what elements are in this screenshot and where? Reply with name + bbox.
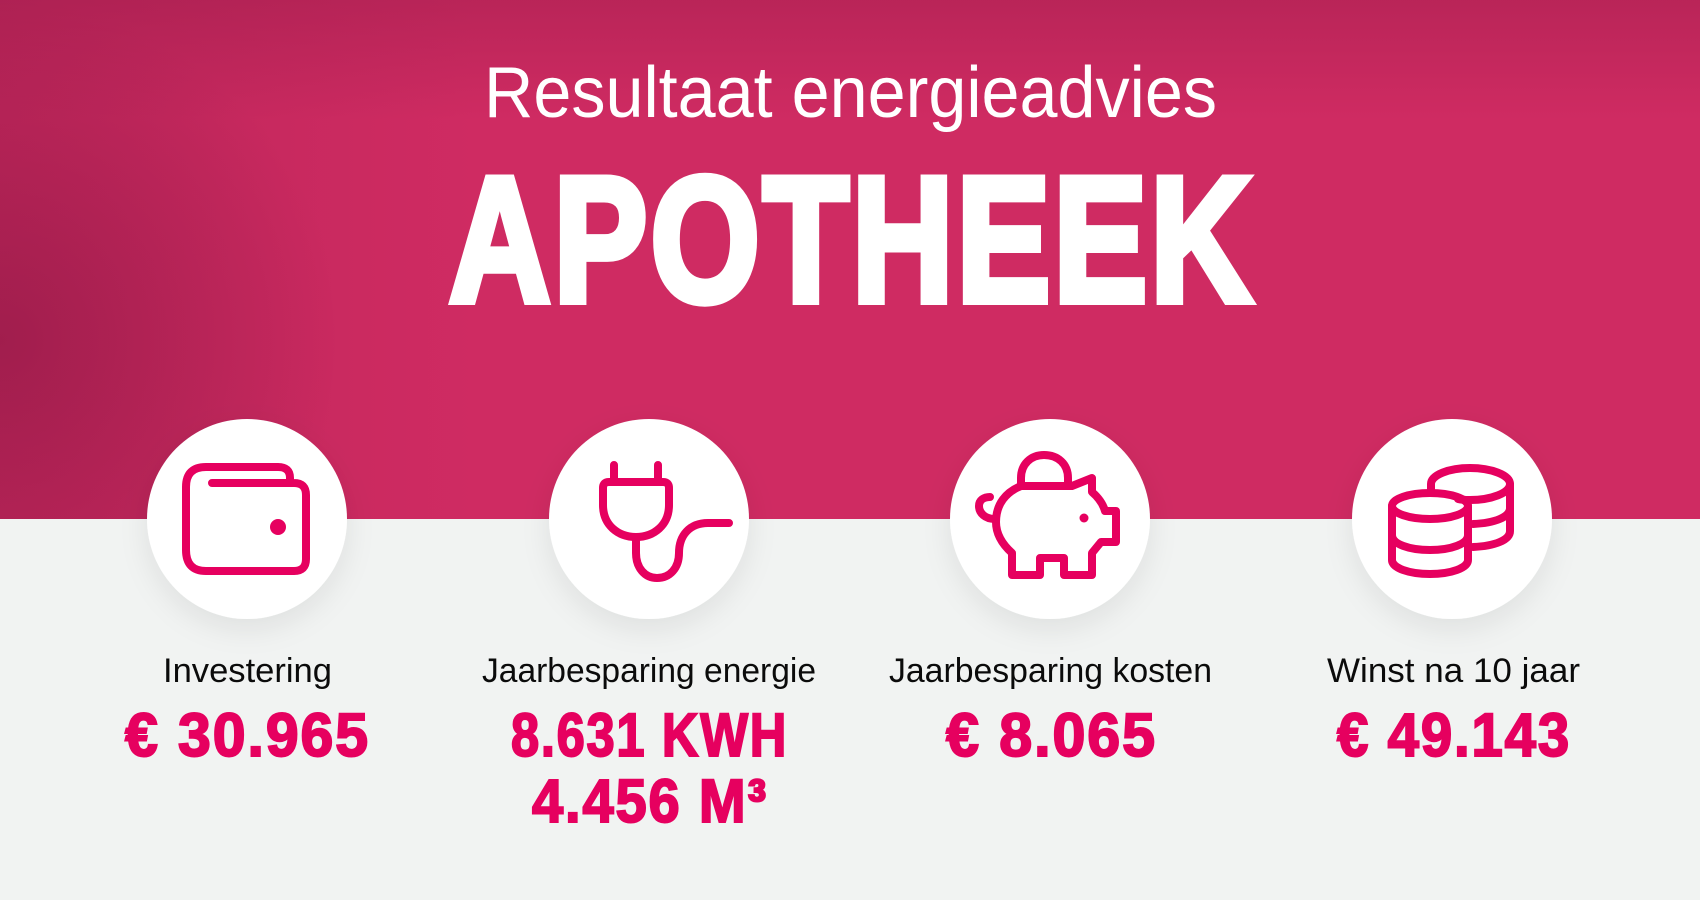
value: m3: 4.456 M³	[532, 767, 768, 835]
label: Winst na 10 jaar	[1327, 652, 1580, 690]
icon circle: coins	[1352, 419, 1552, 619]
value: € 49.143	[1337, 701, 1571, 769]
light grey lower background	[0, 519, 1700, 900]
icon circle: piggy bank	[950, 419, 1150, 619]
panel: winst na 10 jaar	[1327, 419, 1580, 769]
icon circle: wallet	[147, 419, 347, 619]
value: kwh: 8.631 KWH	[511, 701, 788, 769]
value: € 30.965	[125, 701, 370, 769]
panel: investering	[125, 419, 370, 769]
panel: jaarbesparing kosten	[889, 419, 1212, 769]
label: Investering	[163, 652, 332, 690]
icon circle: plug	[549, 419, 749, 619]
subtitle: Resultaat energieadvies	[484, 53, 1217, 133]
title: APOTHEEK	[449, 140, 1255, 339]
label: Jaarbesparing kosten	[889, 652, 1212, 690]
value: € 8.065	[946, 701, 1157, 769]
label: Jaarbesparing energie	[482, 652, 816, 690]
panel: jaarbesparing energie	[482, 419, 816, 835]
pink header background	[0, 0, 1700, 519]
